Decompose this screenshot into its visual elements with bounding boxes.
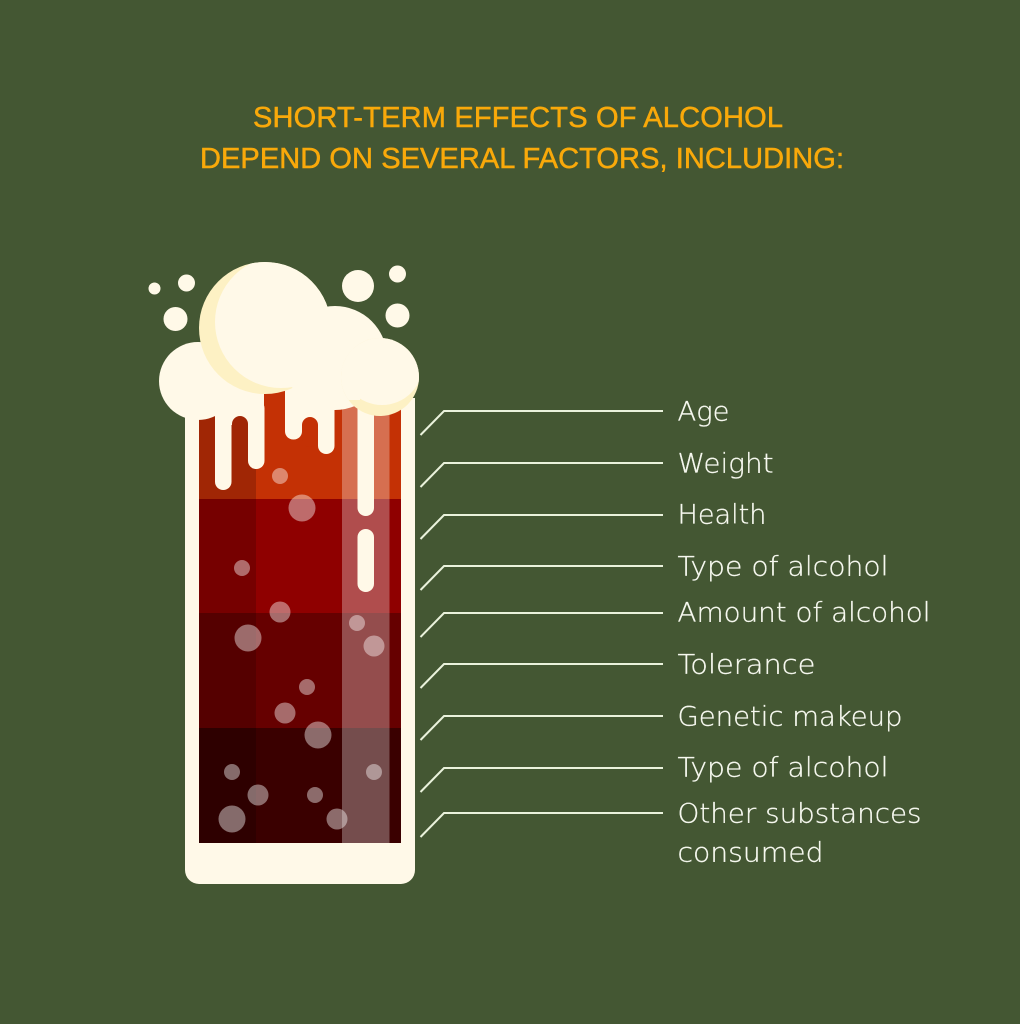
factor: type of alcohol: Type of alcohol	[678, 552, 888, 582]
factor: amount of alcohol: Amount of alcohol	[678, 598, 930, 628]
foam drips	[215, 375, 374, 592]
factor: type of alcohol (second)	[420, 752, 888, 792]
factor: tolerance	[420, 650, 816, 688]
title: SHORT-TERM EFFECTS OF ALCOHOL	[253, 102, 783, 134]
factor: other substances consumed	[420, 798, 922, 868]
factor: weight	[420, 448, 774, 487]
beer glass illustration	[148, 256, 423, 884]
factor: amount of alcohol	[420, 598, 930, 637]
factor list	[420, 396, 930, 868]
factor: other substances consumed: consumed	[678, 838, 824, 868]
factor: genetic makeup: Genetic makeup	[678, 702, 902, 732]
factor: age	[420, 396, 730, 435]
glass body	[185, 398, 415, 884]
title: DEPEND ON SEVERAL FACTORS, INCLUDING:	[200, 143, 844, 175]
factor: tolerance: Tolerance	[678, 650, 816, 680]
factor: weight: Weight	[678, 448, 774, 480]
factor: type of alcohol (second): Type of alcohol	[678, 752, 888, 784]
factor: genetic makeup	[420, 702, 902, 740]
factor: health: Health	[678, 500, 766, 530]
factor: age: Age	[678, 396, 730, 428]
factor: other substances consumed: Other substances	[678, 798, 922, 830]
floating foam bubbles	[148, 266, 410, 331]
glass highlight	[342, 395, 390, 843]
factor: health	[420, 500, 766, 539]
title	[200, 102, 844, 175]
bubbles in beer	[218, 468, 384, 832]
factor: type of alcohol	[420, 552, 888, 590]
beer layers	[199, 385, 401, 843]
foam	[159, 256, 423, 420]
